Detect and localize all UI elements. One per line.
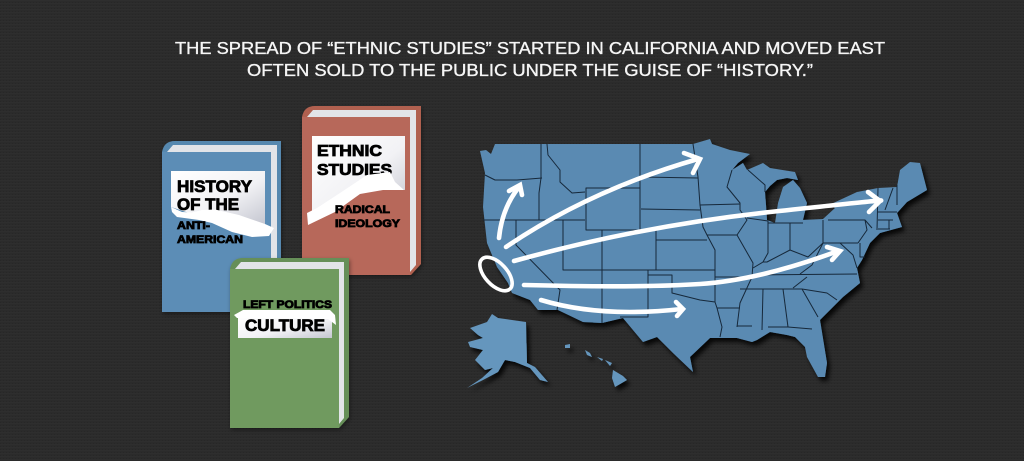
title: THE SPREAD OF “ETHNIC STUDIES” STARTED IN CALIFORNIA AND MOVED EAST [175, 38, 885, 58]
torn paper label [171, 171, 265, 225]
california outline [474, 252, 518, 296]
book title text: CULTURE [245, 317, 325, 335]
arrow: to oregon [499, 185, 522, 238]
alaska [467, 314, 548, 388]
title [175, 38, 885, 80]
book: left politics culture [230, 258, 349, 428]
paper curl [234, 310, 336, 325]
book subtitle text: LEFT POLITICS [243, 299, 332, 311]
book subtitle text: AMERICAN [177, 234, 243, 246]
paper curl [171, 207, 274, 237]
book subtitle text [177, 220, 243, 246]
book title text: OF THE [177, 196, 239, 214]
book title text [317, 143, 392, 179]
title: OFTEN SOLD TO THE PUBLIC UNDER THE GUISE OF “HISTORY.” [247, 60, 813, 80]
state borders [483, 144, 897, 337]
book: ethnic studies radical ideology [302, 106, 421, 275]
map: united states [467, 139, 927, 388]
book: history of the anti-american [162, 141, 281, 312]
book subtitle text: ANTI- [177, 220, 210, 232]
contiguous states [480, 139, 927, 377]
torn paper label [238, 317, 332, 338]
hawaii [565, 344, 627, 387]
book subtitle text: IDEOLOGY [335, 218, 401, 230]
book title text: STUDIES [317, 162, 392, 179]
arrow: to new york [514, 192, 881, 261]
arrow: to virginia [524, 247, 840, 286]
book subtitle text [335, 204, 401, 230]
book subtitle text: RADICAL [335, 204, 390, 216]
torn paper label [312, 136, 405, 215]
arrow: to texas [541, 300, 683, 316]
paper curl [307, 172, 404, 225]
book title text: ETHNIC [317, 143, 382, 160]
book title text [177, 178, 252, 214]
book title text: HISTORY [177, 178, 252, 196]
map land [467, 139, 927, 388]
arrow: to minnesota [506, 153, 700, 247]
